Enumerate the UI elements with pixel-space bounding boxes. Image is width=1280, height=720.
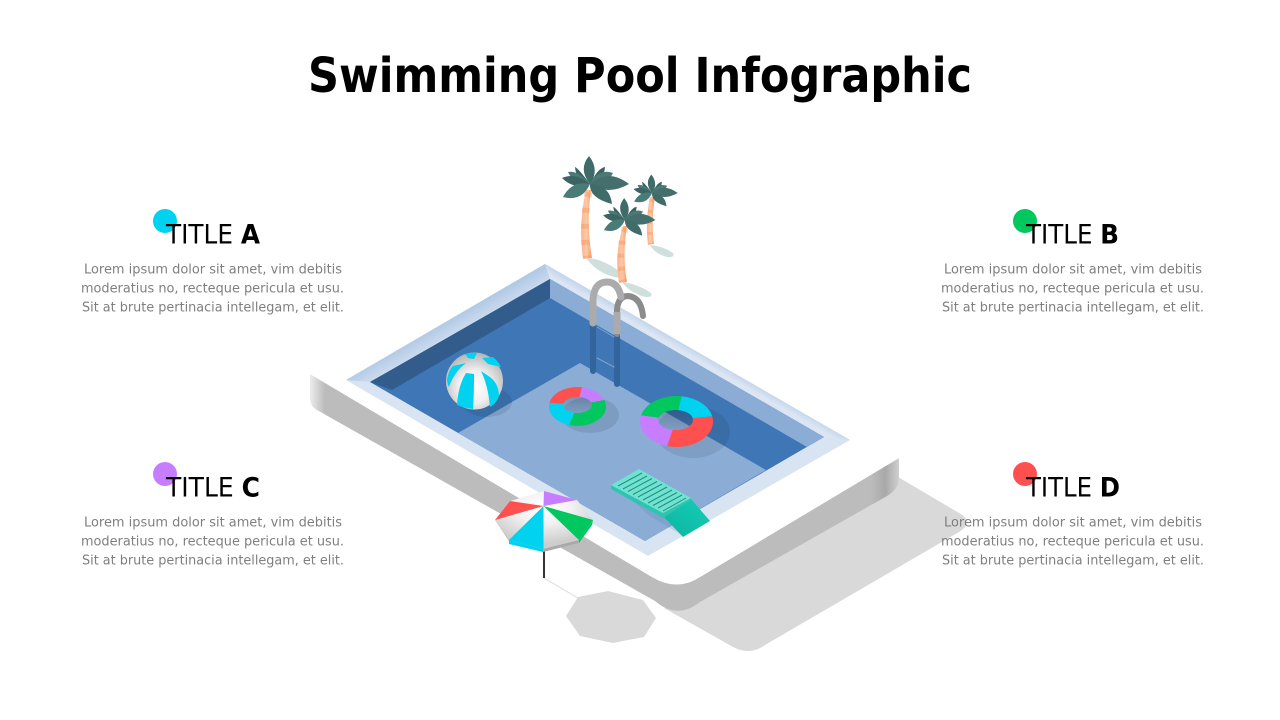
heading D: TITLE D <box>1025 472 1120 504</box>
umbrella panels <box>544 491 577 506</box>
coping back-left band <box>346 264 550 382</box>
small swim ring <box>549 387 619 433</box>
body C: Lorem ipsum dolor sit amet, vim debitis <box>84 516 342 530</box>
ball sphere <box>446 352 503 410</box>
body D: Lorem ipsum dolor sit amet, vim debitis <box>944 516 1202 530</box>
pool coping <box>346 264 850 556</box>
umbrella shadow <box>544 578 656 643</box>
platform deck <box>310 247 899 584</box>
ring shadow <box>656 406 730 458</box>
beach umbrella <box>495 491 593 578</box>
palm crown large <box>562 156 629 204</box>
heading B: TITLE B <box>1025 220 1119 250</box>
large swim ring <box>640 396 730 458</box>
body C: moderatius no, recteque pericula et usu. <box>81 534 344 550</box>
block: title C <box>81 462 344 568</box>
umbrella rim <box>495 520 593 552</box>
body D <box>941 516 1204 568</box>
dot B <box>1013 209 1037 233</box>
body C: Sit at brute pertinacia intellegam, et elit. <box>82 554 344 568</box>
beach ball <box>446 352 512 417</box>
body D: moderatius no, recteque pericula et usu. <box>941 534 1204 550</box>
body A: Sit at brute pertinacia intellegam, et elit. <box>82 300 344 316</box>
ring shadow <box>561 397 619 433</box>
body D: Sit at brute pertinacia intellegam, et elit. <box>942 554 1204 568</box>
palm crown medium <box>603 198 655 236</box>
ladder rails <box>617 296 643 334</box>
body A: moderatius no, recteque pericula et usu. <box>81 282 344 296</box>
shallow floor <box>458 363 766 541</box>
body B <box>941 262 1204 316</box>
body B: moderatius no, recteque pericula et usu. <box>941 282 1204 296</box>
dot D <box>1013 462 1037 486</box>
board edge <box>611 485 691 518</box>
body A <box>81 262 344 316</box>
board base <box>663 499 710 537</box>
back-left wall <box>370 279 550 390</box>
board shadow <box>625 494 680 534</box>
body A: Lorem ipsum dolor sit amet, vim debitis <box>84 262 342 278</box>
diving board <box>611 469 710 537</box>
heading A: TITLE A <box>165 220 260 250</box>
umbrella canopy <box>495 491 593 549</box>
heading C: TITLE C <box>165 472 260 504</box>
platform side <box>310 374 899 611</box>
title: Swimming Pool Infographic <box>308 48 972 104</box>
block: title B <box>941 209 1204 316</box>
ball shadow <box>462 387 512 417</box>
ring segments <box>640 396 713 447</box>
back-right wall <box>550 279 824 447</box>
ring segments <box>549 387 606 426</box>
palm trunks <box>581 190 655 283</box>
block: title A <box>81 209 344 316</box>
board slats <box>618 473 686 511</box>
deep water floor <box>370 279 824 541</box>
ladder underwater <box>593 322 617 384</box>
body B: Lorem ipsum dolor sit amet, vim debitis <box>944 262 1202 278</box>
umbrella pole <box>543 548 545 578</box>
ground shadow <box>664 477 967 651</box>
dot A <box>153 209 177 233</box>
ball stripes <box>447 353 501 409</box>
board top <box>611 469 691 513</box>
ring hole shading <box>562 396 592 414</box>
dot C <box>153 462 177 486</box>
body B: Sit at brute pertinacia intellegam, et elit. <box>942 300 1204 316</box>
palm shadows <box>586 245 673 297</box>
block: title D <box>941 462 1204 568</box>
palm crown small <box>634 175 678 206</box>
swimming pool <box>346 264 850 556</box>
body C <box>81 516 344 568</box>
palm trees <box>562 156 678 297</box>
coping back-right band <box>545 264 850 440</box>
ring hole shading <box>658 410 694 430</box>
ladder <box>593 282 643 384</box>
